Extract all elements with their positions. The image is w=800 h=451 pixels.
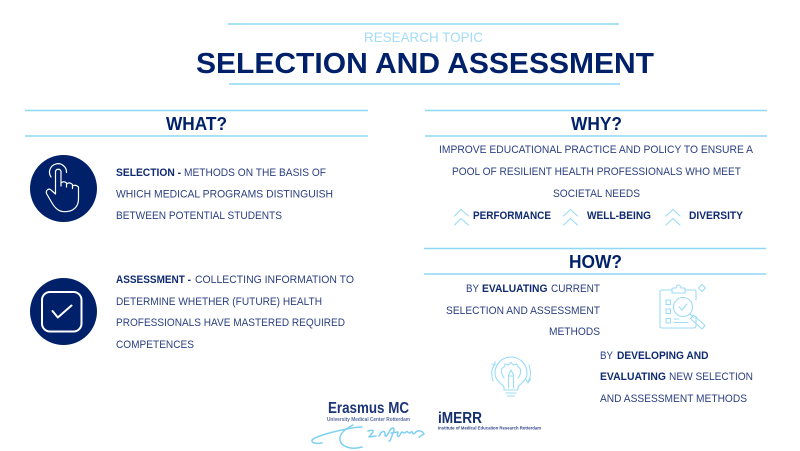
logo: Erasmus MC: University Medical Center Rotterdam	[327, 417, 411, 423]
text: evaluating current methods: SELECTION AND ASSESSMENT	[446, 305, 600, 317]
logo: iMERR	[438, 410, 541, 430]
heading: what: WHAT?	[166, 114, 227, 134]
text: developing new methods: AND ASSESSMENT METHODS	[600, 393, 747, 405]
text: developing new methods: DEVELOPING AND	[617, 350, 709, 362]
icon: well-being chevrons	[564, 210, 578, 225]
text: why statement: IMPROVE EDUCATIONAL PRACTICE AND POLICY TO ENSURE A	[439, 144, 754, 156]
icon: diversity chevrons	[666, 210, 680, 225]
text: why statement	[439, 144, 754, 200]
icon: pointing hand	[30, 155, 97, 222]
text: selection definition: WHICH MEDICAL PROGRAMS DISTINGUISH	[116, 188, 333, 200]
text: evaluating current methods: BY	[466, 283, 480, 295]
text: developing new methods	[600, 350, 753, 405]
icon: checkbox	[30, 278, 97, 345]
logo: iMERR: iMERR	[438, 410, 482, 427]
text: evaluating current methods: METHODS	[549, 326, 600, 338]
title block: RESEARCH TOPIC	[364, 29, 483, 45]
text: developing new methods: BY	[600, 350, 614, 362]
heading: how: HOW?	[569, 252, 622, 272]
text: selection definition: SELECTION -	[116, 167, 181, 179]
label: well-being: WELL-BEING	[587, 210, 651, 222]
panel: how	[424, 248, 766, 405]
icon: performance chevrons	[454, 210, 468, 225]
text: why statement: SOCIETAL NEEDS	[553, 188, 640, 200]
text: why statement: POOL OF RESILIENT HEALTH PROFESSIONALS WHO MEET	[452, 166, 741, 178]
text: assessment definition: ASSESSMENT -	[116, 274, 191, 286]
heading: why: WHY?	[571, 114, 622, 134]
panel: what	[25, 110, 368, 351]
text: selection definition: BETWEEN POTENTIAL STUDENTS	[116, 210, 282, 222]
logo: Erasmus MC: Erasmus MC	[328, 400, 409, 417]
logo: Erasmus MC	[312, 400, 424, 448]
text: selection definition: METHODS ON THE BASIS OF	[184, 167, 326, 179]
text: assessment definition: COMPETENCES	[116, 339, 194, 351]
icon: light bulb with gear and pencil	[492, 357, 530, 396]
text: assessment definition: PROFESSIONALS HAVE MASTERED REQUIRED	[116, 317, 345, 329]
text: assessment definition	[116, 274, 354, 351]
text: developing new methods: EVALUATING	[600, 371, 666, 383]
logo: iMERR: Institute of Medical Education Research Rotterdam	[438, 426, 541, 430]
text: assessment definition: DETERMINE WHETHER (FUTURE) HEALTH	[116, 296, 322, 308]
text: assessment definition: COLLECTING INFORMATION TO	[195, 274, 354, 286]
text: developing new methods: NEW SELECTION	[669, 371, 753, 383]
text: evaluating current methods: EVALUATING	[482, 283, 548, 295]
icon: clipboard with magnifier	[660, 284, 706, 329]
text: evaluating current methods	[446, 283, 600, 338]
title block	[196, 24, 654, 84]
label: performance: PERFORMANCE	[473, 210, 551, 222]
title block: SELECTION AND ASSESSMENT	[196, 48, 654, 80]
label: diversity: DIVERSITY	[689, 210, 744, 222]
text: evaluating current methods: CURRENT	[551, 283, 600, 295]
text: selection definition	[116, 167, 333, 222]
panel: why	[425, 110, 767, 225]
